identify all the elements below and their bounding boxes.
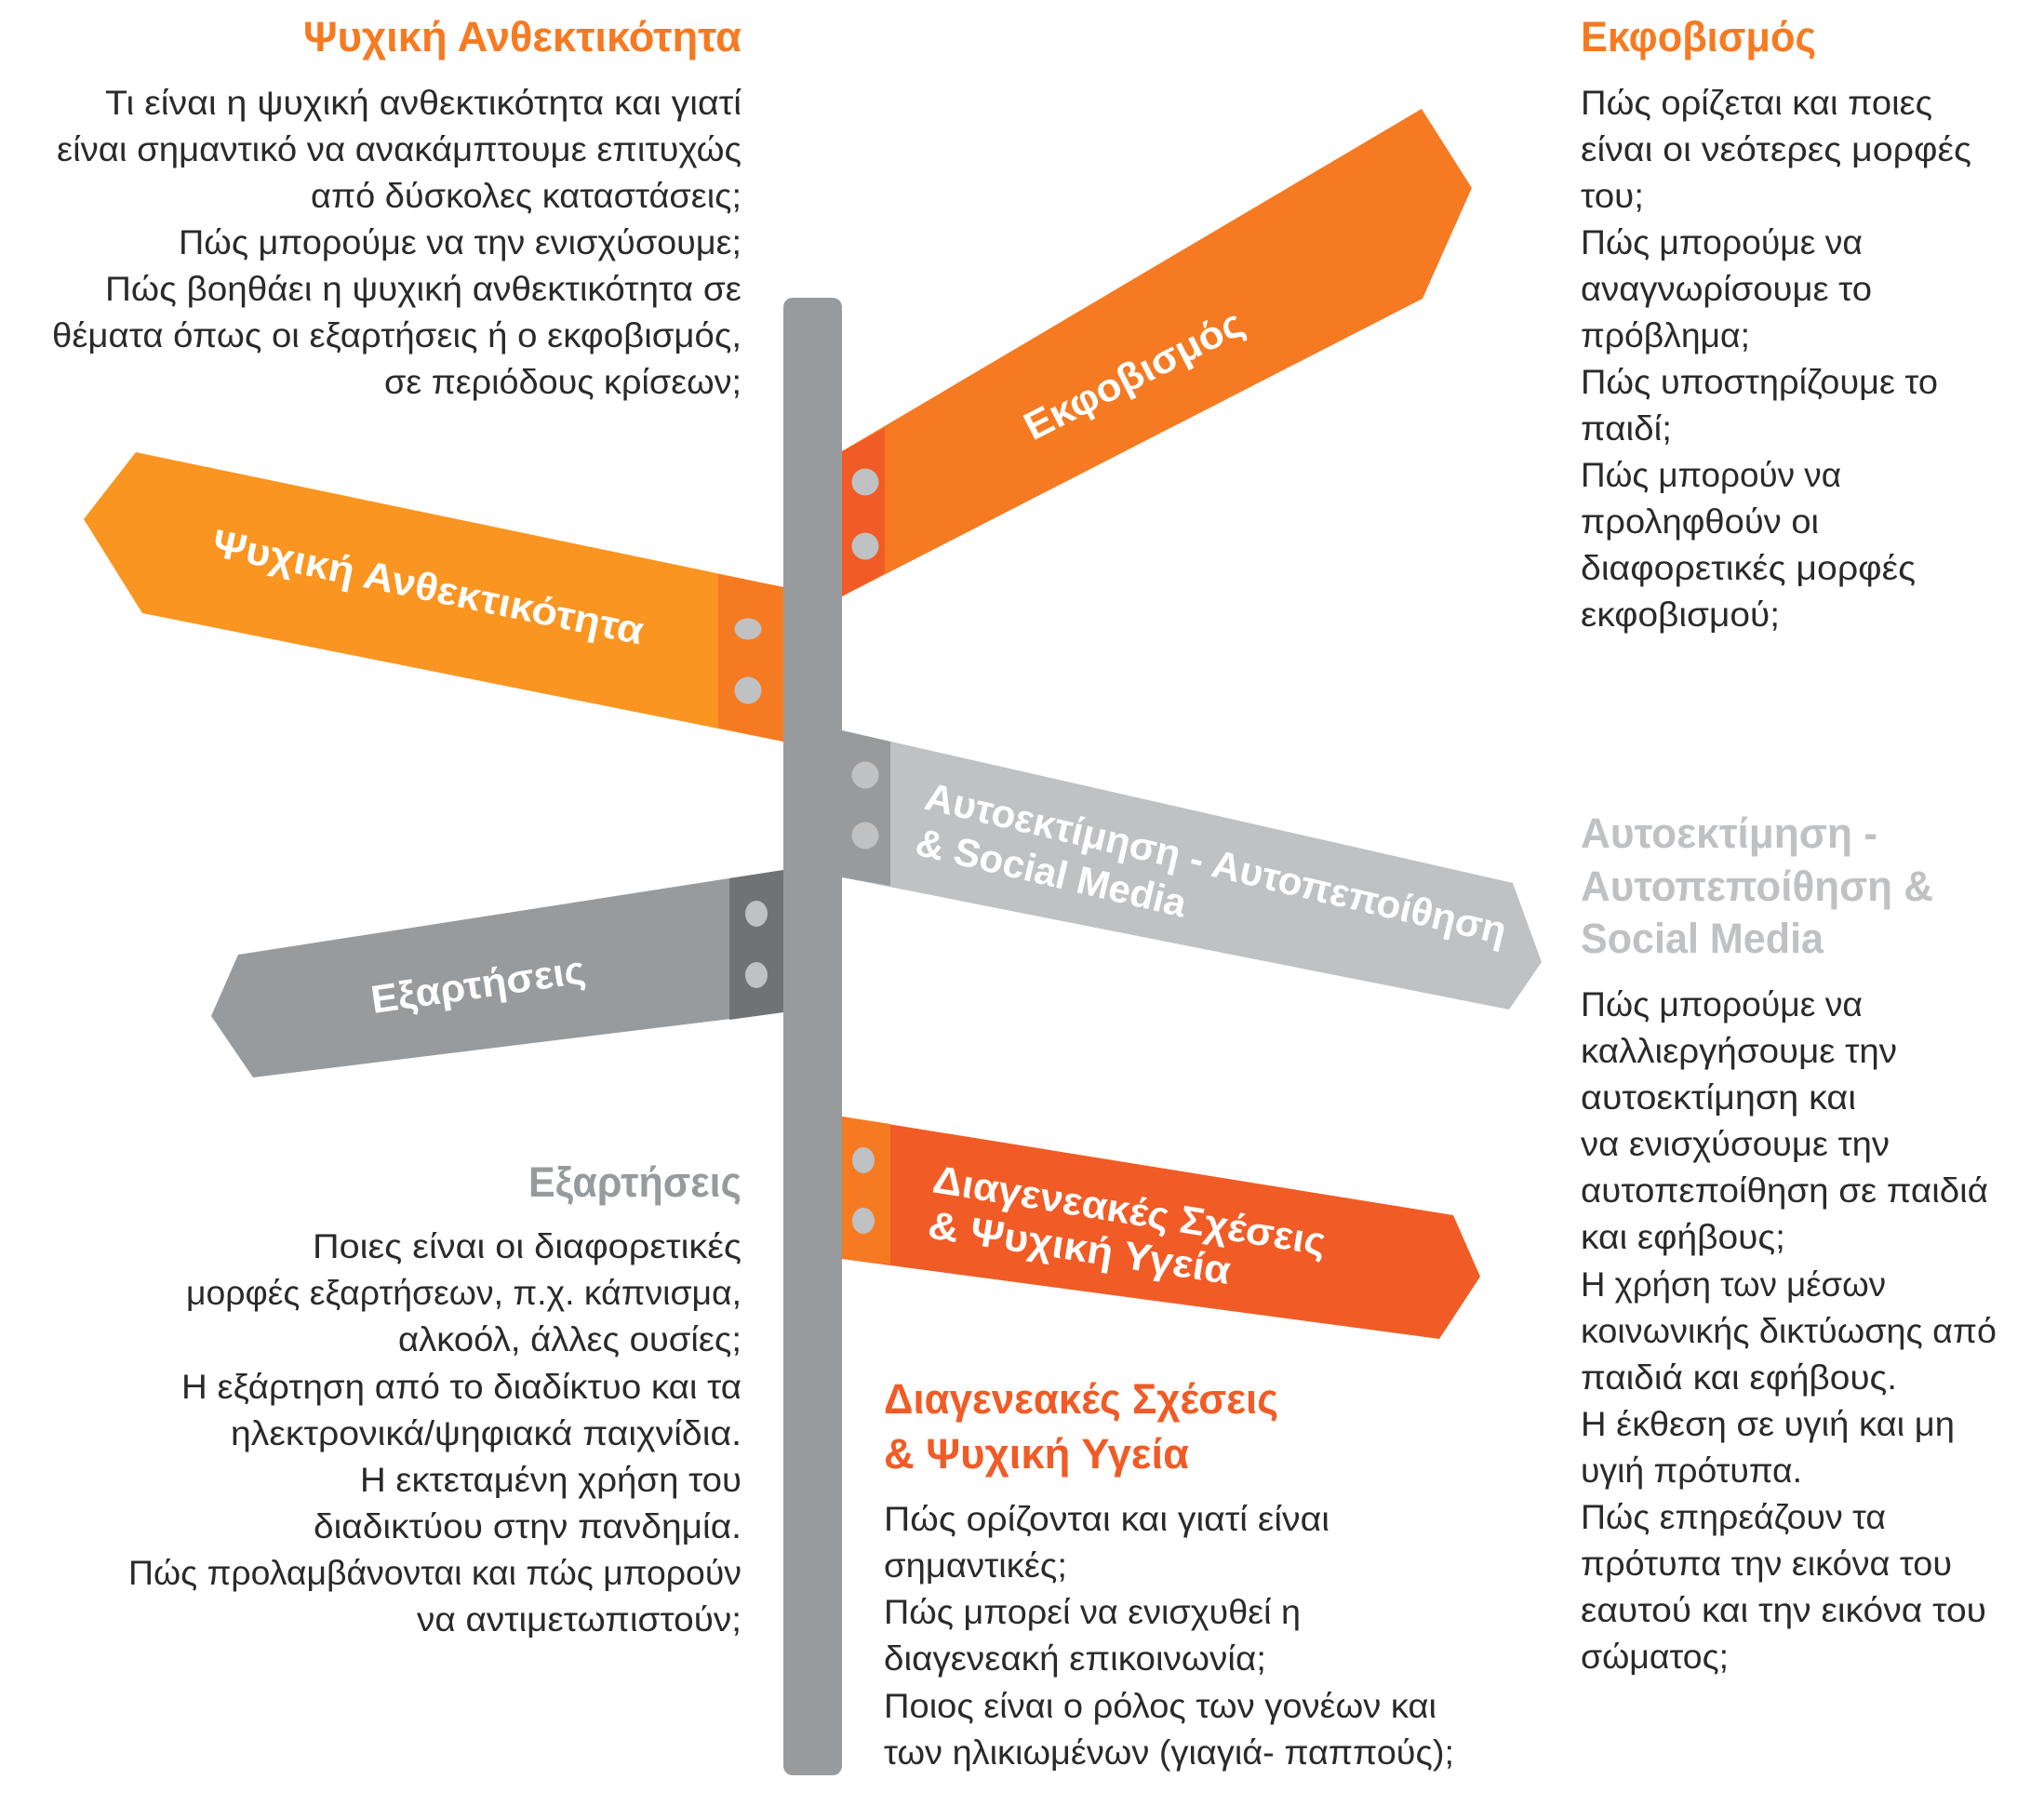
text block: Εκφοβισμός: προληφθούν οι: [1581, 502, 1819, 541]
sign: Εξαρτήσεις: Εξαρτήσεις: [368, 947, 588, 1022]
text block: Αυτοεκτίμηση: αυτοεκτίμηση και: [1581, 1078, 1856, 1117]
text block: Αυτοεκτίμηση: πρότυπα την εικόνα του: [1581, 1545, 1952, 1583]
text block: Εξαρτήσεις: [128, 1158, 741, 1639]
text block: Αυτοεκτίμηση: εαυτού και την εικόνα του: [1581, 1591, 1986, 1629]
text block: Ψυχική Ανθεκτικότητα: Τι είναι η ψυχική ανθεκτικότητα και γιατί: [105, 84, 741, 122]
text block: Διαγενεακές Σχέσεις: σημαντικές;: [884, 1546, 1067, 1585]
heading: Αυτοεκτίμηση - Αυτοπεποίθηση & Social Media: Αυτοεκτίμηση -: [1581, 809, 1877, 857]
text block: Διαγενεακές Σχέσεις: Πώς ορίζονται και γιατί είναι: [884, 1500, 1329, 1538]
text block: Ψυχική Ανθεκτικότητα: σε περιόδους κρίσεων;: [384, 363, 741, 401]
text block: Διαγενεακές Σχέσεις: διαγενεακή επικοινωνία;: [884, 1639, 1266, 1678]
text block: Ψυχική Ανθεκτικότητα: Πώς μπορούμε να την ενισχύσουμε;: [179, 223, 741, 261]
heading: Διαγενεακές Σχέσεις & Ψυχική Υγεία: & Ψυχική Υγεία: [884, 1430, 1189, 1478]
text block: Εκφοβισμός: διαφορετικές μορφές: [1581, 549, 1916, 587]
text block: Αυτοεκτίμηση: σώματος;: [1581, 1638, 1729, 1676]
text block: Αυτοεκτίμηση: Η έκθεση σε υγιή και μη: [1581, 1405, 1955, 1443]
text block: Εκφοβισμός: Πώς υποστηρίζουμε το: [1581, 363, 1938, 401]
text block: Εξαρτήσεις: Ποιες είναι οι διαφορετικές: [313, 1227, 741, 1265]
heading: Εκφοβισμός: Εκφοβισμός: [1581, 13, 1816, 60]
sign: Εκφοβισμός: Εκφοβισμός: [1017, 301, 1250, 448]
sign: Αυτοεκτίμηση: [842, 730, 1542, 1010]
heading: Διαγενεακές Σχέσεις & Ψυχική Υγεία: [884, 1375, 1278, 1478]
text block: Εκφοβισμός: πρόβλημα;: [1581, 316, 1750, 355]
text block: Εκφοβισμός: Πώς ορίζεται και ποιες: [1581, 84, 1932, 122]
text block: Ψυχική Ανθεκτικότητα: από δύσκολες καταστάσεις;: [311, 177, 741, 215]
sign: Εκφοβισμός: [842, 109, 1472, 596]
sign: Ψυχική Ανθεκτικότητα: Ψυχική Ανθεκτικότητα: [208, 521, 648, 653]
heading: Ψυχική Ανθεκτικότητα: Ψυχική Ανθεκτικότητα: [303, 13, 741, 60]
sign: Διαγενεακές Σχέσεις: Διαγενεακές Σχέσεις: [930, 1157, 1329, 1264]
text block: Εκφοβισμός: Πώς μπορούν να: [1581, 456, 1841, 494]
text block: Εξαρτήσεις: διαδικτύου στην πανδημία.: [314, 1507, 741, 1545]
text block: Ψυχική Ανθεκτικότητα: είναι σημαντικό να ανακάμπτουμε επιτυχώς: [57, 130, 741, 168]
sign: Διαγενεακές Σχέσεις: [842, 1117, 1480, 1339]
heading: Αυτοεκτίμηση - Αυτοπεποίθηση & Social Media: Αυτοπεποίθηση &: [1581, 863, 1933, 910]
text block: Εξαρτήσεις: ηλεκτρονικά/ψηφιακά παιχνίδια.: [231, 1414, 741, 1452]
text block: Διαγενεακές Σχέσεις: Πώς μπορεί να ενισχυθεί η: [884, 1593, 1301, 1631]
text block: Αυτοεκτίμηση: Πώς μπορούμε να: [1581, 985, 1863, 1023]
sign: Εξαρτήσεις: [211, 870, 783, 1077]
text block: Αυτοεκτίμηση: [1581, 809, 1997, 1676]
text block: Ψυχική Ανθεκτικότητα: [52, 13, 741, 401]
heading: Αυτοεκτίμηση - Αυτοπεποίθηση & Social Media: Social Media: [1581, 915, 1824, 962]
text block: Εκφοβισμός: του;: [1581, 177, 1644, 215]
text block: Αυτοεκτίμηση: υγιή πρότυπα.: [1581, 1451, 1802, 1490]
sign: Διαγενεακές Σχέσεις: & Ψυχική Υγεία: [926, 1202, 1234, 1292]
sign: Αυτοεκτίμηση: & Social Media: [912, 820, 1191, 926]
text block: Εξαρτήσεις: μορφές εξαρτήσεων, π.χ. κάπνισμα,: [186, 1274, 741, 1312]
text block: Αυτοεκτίμηση: Η χρήση των μέσων: [1581, 1265, 1886, 1304]
heading: Διαγενεακές Σχέσεις & Ψυχική Υγεία: Διαγενεακές Σχέσεις: [884, 1375, 1278, 1423]
text block: Διαγενεακές Σχέσεις: των ηλικιωμένων (γιαγιά- παππούς);: [884, 1733, 1454, 1772]
text block: Εξαρτήσεις: Η εξάρτηση από το διαδίκτυο και τα: [181, 1368, 741, 1406]
text block: Εκφοβισμός: Πώς μπορούμε να: [1581, 223, 1863, 261]
text block: Αυτοεκτίμηση: καλλιεργήσουμε την: [1581, 1032, 1897, 1070]
text block: Εκφοβισμός: [1581, 13, 1971, 634]
text block: Αυτοεκτίμηση: να ενισχύσουμε την: [1581, 1125, 1890, 1163]
sign: Αυτοεκτίμηση: Αυτοεκτίμηση - Αυτοπεποίθηση: [921, 774, 1511, 953]
text block: Διαγενεακές Σχέσεις: [884, 1375, 1454, 1772]
text block: Αυτοεκτίμηση: Πώς επηρεάζουν τα: [1581, 1498, 1886, 1536]
text block: Εκφοβισμός: παιδί;: [1581, 409, 1672, 448]
text block: Εκφοβισμός: αναγνωρίσουμε το: [1581, 270, 1872, 308]
text block: Εκφοβισμός: εκφοβισμού;: [1581, 595, 1780, 634]
sign: Ψυχική Ανθεκτικότητα: [84, 452, 783, 742]
text block: Εκφοβισμός: είναι οι νεότερες μορφές: [1581, 130, 1971, 168]
heading: Εξαρτήσεις: Εξαρτήσεις: [528, 1158, 741, 1206]
text block: Αυτοεκτίμηση: κοινωνικής δικτύωσης από: [1581, 1312, 1997, 1350]
text block: Ψυχική Ανθεκτικότητα: Πώς βοηθάει η ψυχική ανθεκτικότητα σε: [105, 270, 741, 308]
text block: Εξαρτήσεις: να αντιμετωπιστούν;: [417, 1600, 741, 1639]
text block: Διαγενεακές Σχέσεις: Ποιος είναι ο ρόλος των γονέων και: [884, 1687, 1436, 1725]
text block: Ψυχική Ανθεκτικότητα: θέματα όπως οι εξαρτήσεις ή ο εκφοβισμός,: [52, 316, 741, 355]
text block: Αυτοεκτίμηση: αυτοπεποίθηση σε παιδιά: [1581, 1171, 1988, 1210]
text block: Εξαρτήσεις: Πώς προλαμβάνονται και πώς μπορούν: [128, 1554, 741, 1592]
text block: Αυτοεκτίμηση: και εφήβους;: [1581, 1218, 1785, 1256]
signpost pole: [783, 298, 842, 1775]
text block: Αυτοεκτίμηση: παιδιά και εφήβους.: [1581, 1358, 1897, 1397]
heading: Αυτοεκτίμηση - Αυτοπεποίθηση & Social Media: [1581, 809, 1933, 962]
text block: Εξαρτήσεις: αλκοόλ, άλλες ουσίες;: [398, 1320, 741, 1358]
text block: Εξαρτήσεις: Η εκτεταμένη χρήση του: [360, 1461, 741, 1499]
